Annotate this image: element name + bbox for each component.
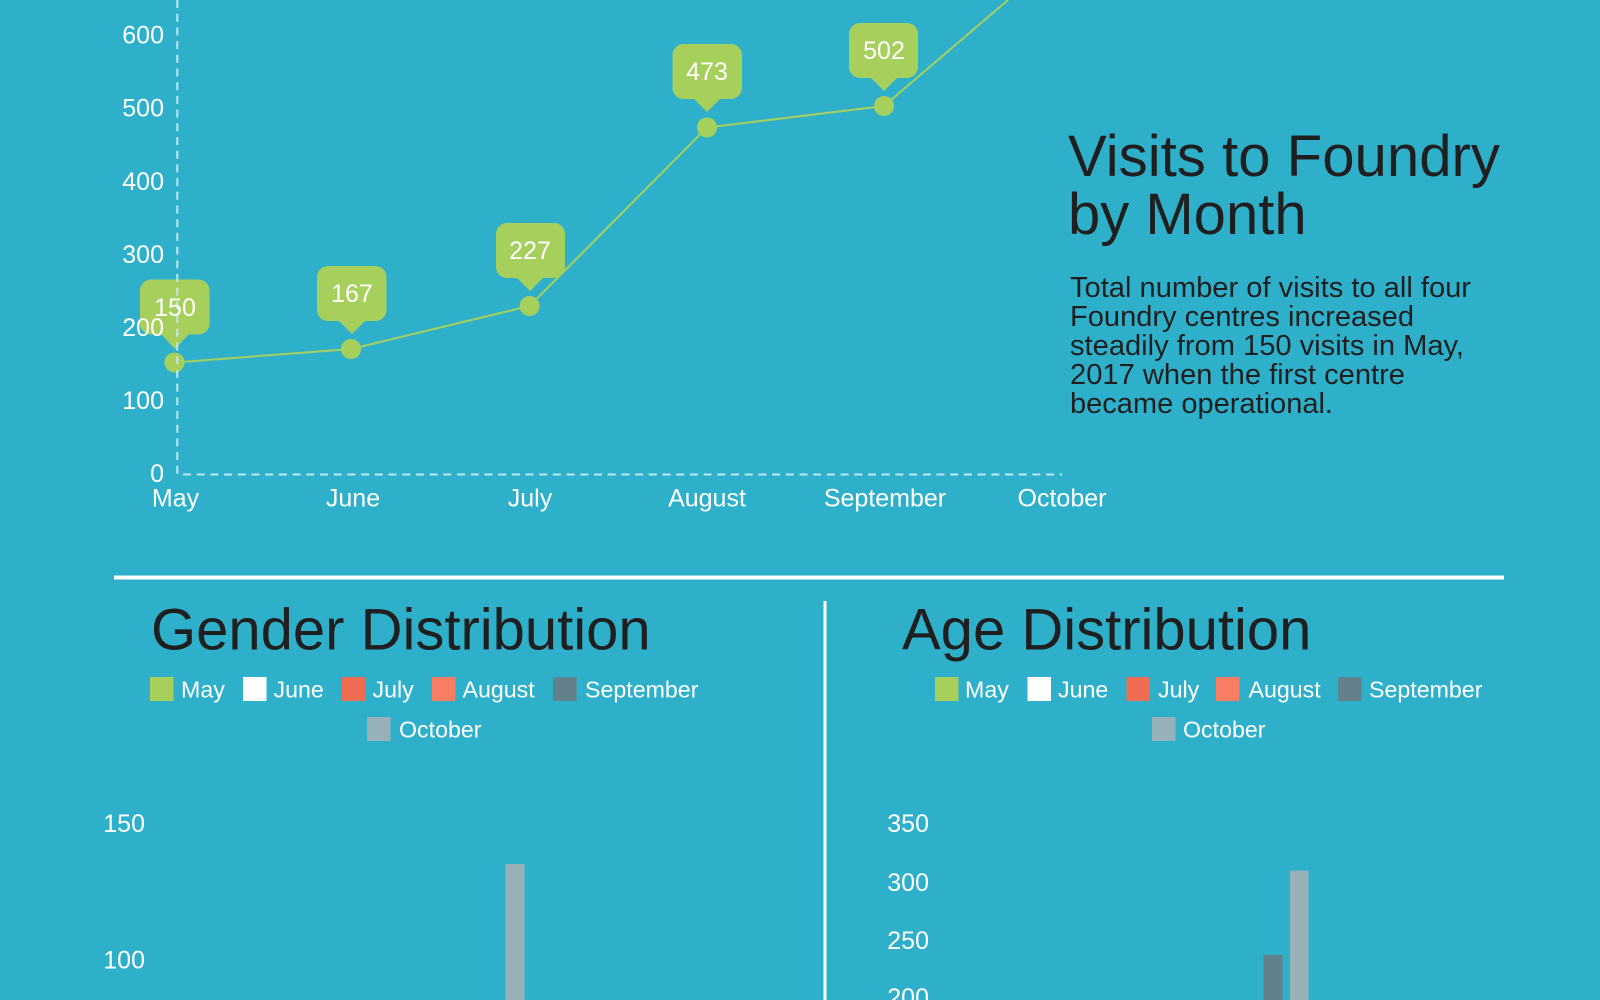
y axis labels: 600	[122, 22, 164, 50]
bar chart: age	[887, 810, 1308, 1000]
callout: August 473	[672, 44, 742, 112]
legend: gender chart months: June	[274, 676, 324, 702]
heading: Gender Distribution: Gender Distribution	[151, 598, 651, 662]
text block: visits description: Total number of visits to all four	[1070, 272, 1472, 304]
line chart: visits by month	[122, 0, 1106, 512]
value label: May: 150	[154, 294, 196, 322]
text block: visits description: became operational.	[1070, 388, 1333, 420]
text block: visits description	[1070, 272, 1472, 420]
x axis labels: June	[326, 484, 380, 512]
y axis labels	[122, 22, 164, 488]
bar chart: gender	[103, 810, 524, 1000]
y axis labels: 400	[122, 168, 164, 196]
y axis labels: 100	[122, 387, 164, 415]
y axis labels: 200	[122, 314, 164, 342]
x axis labels: July	[508, 484, 553, 512]
legend: gender chart months	[150, 676, 699, 742]
callout: July 227	[496, 223, 565, 291]
y axis labels: 500	[122, 94, 164, 122]
bar chart: age: 250	[887, 927, 929, 955]
callout: July 227: 227	[509, 237, 551, 265]
heading: Visits to Foundry by Month: Visits to Foundry	[1068, 124, 1500, 189]
y axis labels: 300	[122, 241, 164, 269]
panel: age distribution	[887, 598, 1483, 1000]
legend: age chart months	[935, 676, 1483, 742]
data line	[174, 0, 1008, 362]
x axis labels: October	[1018, 484, 1106, 512]
x axis labels: May	[152, 484, 200, 512]
heading: Visits to Foundry by Month	[1068, 124, 1500, 247]
text block: visits description: Foundry centres increased	[1070, 301, 1414, 333]
text block: visits description: 2017 when the first centre	[1070, 359, 1405, 391]
x axis labels	[152, 484, 1106, 512]
legend: gender chart months: July	[372, 676, 414, 702]
heading: Visits to Foundry by Month: by Month	[1068, 182, 1307, 247]
bar chart: age: 300	[887, 869, 929, 897]
callout: May 150 bubble	[140, 280, 210, 349]
legend: gender chart months: September	[585, 676, 699, 702]
bar chart: age: 350	[887, 810, 929, 838]
heading: Age Distribution: Age Distribution	[902, 598, 1311, 662]
legend: gender chart months: August	[462, 676, 535, 702]
legend: gender chart months: October	[399, 716, 482, 742]
callout: September 502: 502	[863, 37, 905, 65]
legend: age chart months: September	[1369, 676, 1483, 702]
callout: June 167	[317, 266, 386, 334]
x axis labels: August	[668, 484, 746, 512]
legend: age chart months: May	[965, 676, 1009, 702]
callout: June 167: 167	[331, 280, 373, 308]
y axis labels: 0	[150, 460, 164, 488]
legend: age chart months: August	[1248, 676, 1321, 702]
data points	[164, 96, 894, 372]
legend: age chart months: July	[1158, 676, 1200, 702]
legend: gender chart months: May	[181, 676, 225, 702]
panel: gender distribution	[103, 598, 699, 1000]
bar chart: gender: 150	[103, 810, 145, 838]
text block: visits description: steadily from 150 visits in May,	[1070, 330, 1464, 362]
callout: August 473: 473	[686, 58, 728, 86]
axes	[177, 0, 1062, 474]
x axis labels: September	[824, 484, 946, 512]
legend: age chart months: June	[1058, 676, 1108, 702]
legend: age chart months: October	[1183, 716, 1266, 742]
callout: September 502	[849, 23, 918, 91]
bar chart: gender: 100	[103, 946, 145, 974]
